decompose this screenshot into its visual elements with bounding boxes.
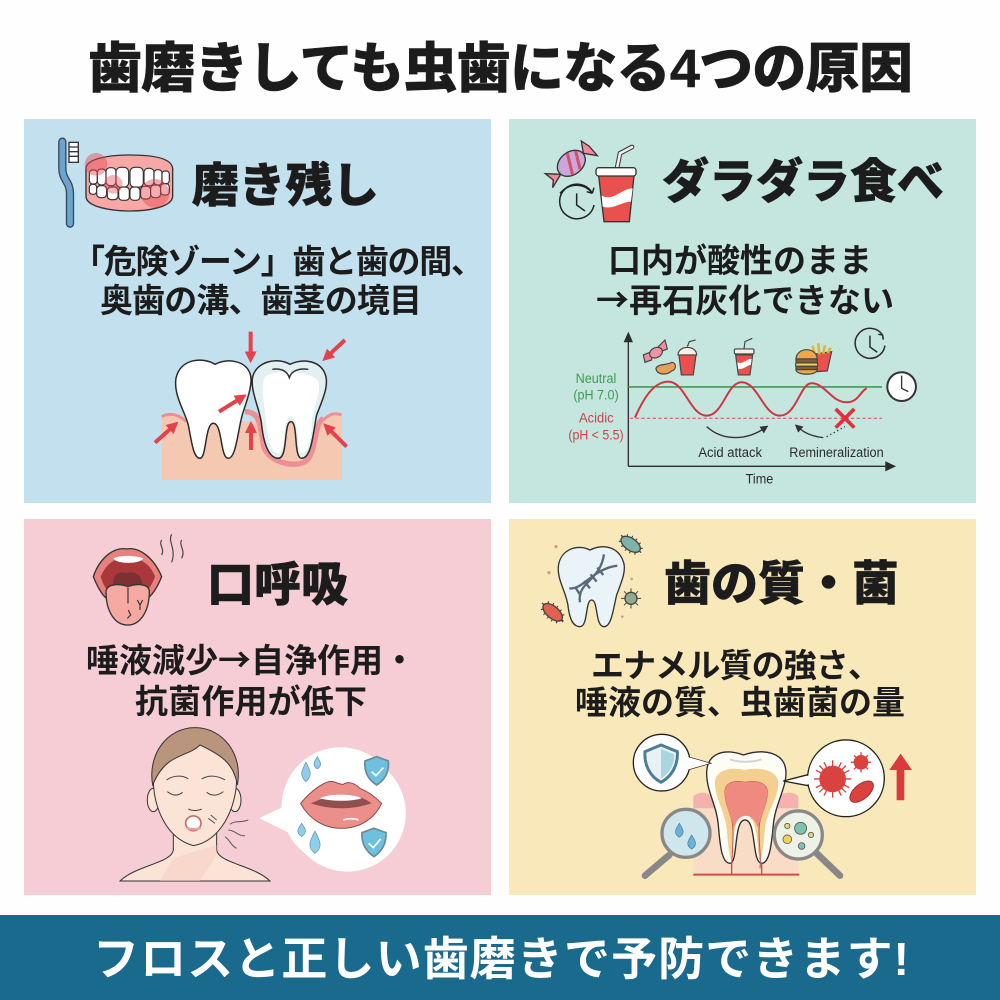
- food icons: [643, 338, 832, 375]
- text block: danger zones: [72, 243, 484, 319]
- axes: [625, 333, 895, 470]
- heading: 磨き残し: 磨き残し: [192, 159, 379, 212]
- axis and line labels: Acid attack: [698, 445, 762, 460]
- axis and line labels: Time: [746, 472, 773, 487]
- title: 歯磨きしても虫歯になる4つの原因: [88, 39, 913, 99]
- icon: red up arrow: [889, 754, 912, 800]
- neutral line: [628, 384, 882, 389]
- speech bubble: dry lips, drops and shields: [259, 747, 406, 872]
- panel: 歯の質・菌: [509, 519, 976, 895]
- axis and line labels: Neutral: [576, 371, 616, 386]
- text block: saliva reduction: [86, 634, 416, 720]
- text block: saliva reduction: 抗菌作用が低下: [135, 683, 367, 720]
- axis and line labels: (pH < 5.5): [568, 427, 624, 442]
- text block: acidity: [596, 242, 894, 322]
- callout: enamel shield: [633, 734, 710, 791]
- text block: enamel, saliva, bacteria: [575, 647, 905, 721]
- footer banner: [0, 915, 1000, 1000]
- gum and jaw: [693, 793, 799, 876]
- text block: enamel, saliva, bacteria: 唾液の質、虫歯菌の量: [575, 684, 905, 721]
- icon: open mouth with dry tongue: [93, 534, 183, 625]
- text block: acidity: →再石灰化できない: [596, 274, 894, 322]
- axis and line labels: Remineralization: [789, 445, 884, 460]
- callout: bacteria: [783, 740, 884, 817]
- heading: 口呼吸: 口呼吸: [207, 558, 348, 611]
- acidic threshold: [630, 417, 882, 420]
- arrows: acid attack and remineralization: [707, 427, 845, 438]
- icon: candy, clock and drink: [545, 141, 636, 222]
- axis and line labels: (pH 7.0): [573, 387, 619, 402]
- icon: toothbrush and teeth: [62, 142, 173, 224]
- illustration: sleeping woman breathing through mouth: [120, 728, 270, 881]
- text block: danger zones: 「危険ゾーン」歯と歯の間、: [72, 243, 484, 280]
- icon: clock with arrow: [855, 328, 885, 358]
- panel: 磨き残し: [24, 119, 491, 503]
- chart: pH over time: [568, 328, 916, 487]
- tooth: [707, 752, 786, 875]
- heading: 歯の質・菌: 歯の質・菌: [664, 557, 899, 610]
- icon: wall clock: [887, 372, 916, 401]
- pH curve: [635, 382, 867, 418]
- illustration: teeth with danger-zone arrows: [155, 332, 347, 480]
- panel: ダラダラ食べ: [509, 119, 976, 503]
- footer message: フロスと正しい歯磨きで予防できます!: [93, 933, 909, 985]
- magnifier: microbes: [774, 811, 840, 876]
- axis and line labels: [568, 371, 884, 487]
- text block: acidity: 口内が酸性のまま: [608, 242, 872, 279]
- panel: 口呼吸: [24, 519, 491, 895]
- heading: ダラダラ食べ: ダラダラ食べ: [662, 155, 944, 208]
- cross mark: [836, 409, 854, 428]
- magnifier: saliva drops: [645, 809, 710, 876]
- text block: saliva reduction: 唾液減少→自浄作用・: [86, 634, 416, 682]
- axis and line labels: Acidic: [579, 411, 614, 426]
- icon: tooth with DNA and bacteria: [540, 533, 643, 627]
- text block: danger zones: 奥歯の溝、歯茎の境目: [100, 282, 422, 319]
- text block: enamel, saliva, bacteria: エナメル質の強さ、: [591, 647, 881, 684]
- illustration: tooth cross-section with callouts: [633, 734, 912, 876]
